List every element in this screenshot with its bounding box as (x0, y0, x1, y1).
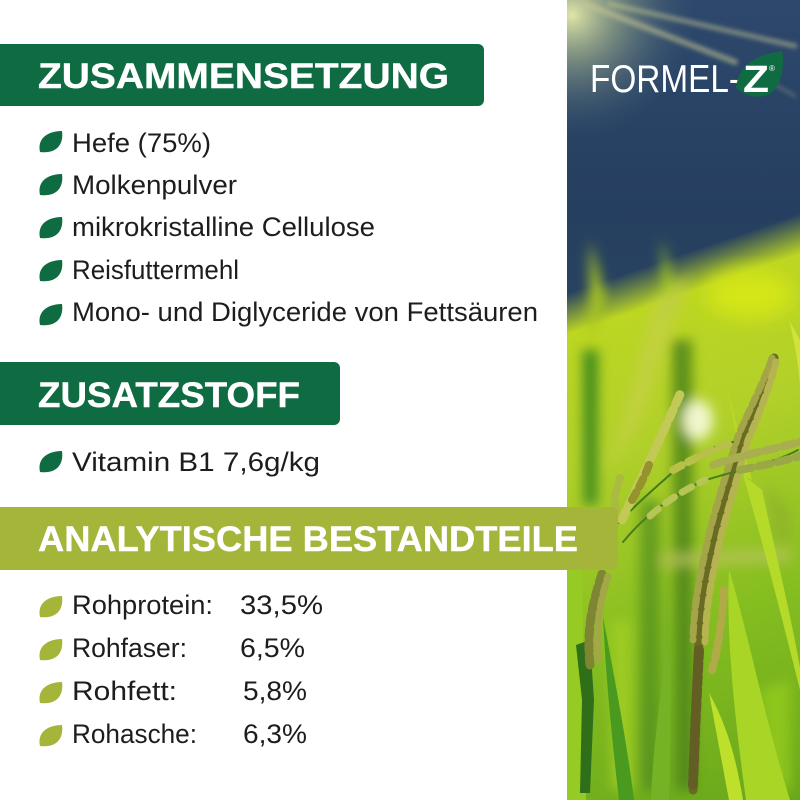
rice panicle: left branch (615, 392, 681, 520)
list: analytical values (39, 590, 323, 749)
heading: Analytische Bestandteile: ANALYTISCHE BESTANDTEILE (38, 520, 578, 559)
list: analytical values: Rohfett: (72, 676, 177, 706)
list: analytical values: 33,5% (240, 590, 323, 620)
heading: Zusammensetzung: ZUSAMMENSETZUNG (38, 57, 449, 96)
list: ingredients: Reisfuttermehl (72, 255, 239, 285)
list: analytical values: 6,3% (243, 719, 307, 749)
section: Zusatzstoff (0, 362, 340, 477)
heading bar: Zusammensetzung (0, 44, 484, 106)
logo leaf (736, 51, 783, 97)
heading bar: Analytische Bestandteile (0, 507, 618, 570)
list: ingredients: mikrokristalline Cellulose (72, 212, 375, 242)
section: Zusammensetzung (0, 44, 538, 327)
list: analytical values: Rohprotein: (72, 590, 213, 620)
logo: FORMEL-Z: ® (769, 64, 775, 73)
sky (567, 0, 800, 332)
list: analytical values: 5,8% (243, 676, 307, 706)
list: ingredients: Mono- und Diglyceride von Fettsäuren (72, 297, 538, 327)
section: Analytische Bestandteile (0, 507, 618, 749)
list: ingredients (39, 128, 538, 327)
rice panicle: right vertical (693, 358, 776, 790)
list: ingredients: Molkenpulver (72, 170, 237, 200)
list: analytical values: Rohfaser: (72, 633, 187, 663)
green field (567, 200, 800, 800)
sun glow (567, 0, 674, 118)
bright blurred glow (706, 271, 794, 319)
heading bar: Zusatzstoff (0, 362, 340, 425)
list: analytical values: 6,5% (240, 633, 305, 663)
list: analytical values: Rohasche: (72, 719, 197, 749)
photo: rice plants against sky (567, 0, 800, 800)
list: ingredients: Hefe (75%) (72, 128, 211, 158)
logo: FORMEL-Z: FORMEL- (590, 58, 740, 101)
sun rays (585, 4, 795, 96)
list: additive: Vitamin B1 7,6g/kg (72, 447, 320, 477)
logo: FORMEL-Z: Z (743, 59, 769, 101)
rice panicle: horizontal branches (619, 442, 800, 542)
foreground leaves (567, 320, 800, 800)
rice panicle: lower left (589, 574, 608, 665)
blurred background stems (583, 238, 790, 790)
heading: Zusatzstoff: ZUSATZSTOFF (38, 376, 300, 415)
